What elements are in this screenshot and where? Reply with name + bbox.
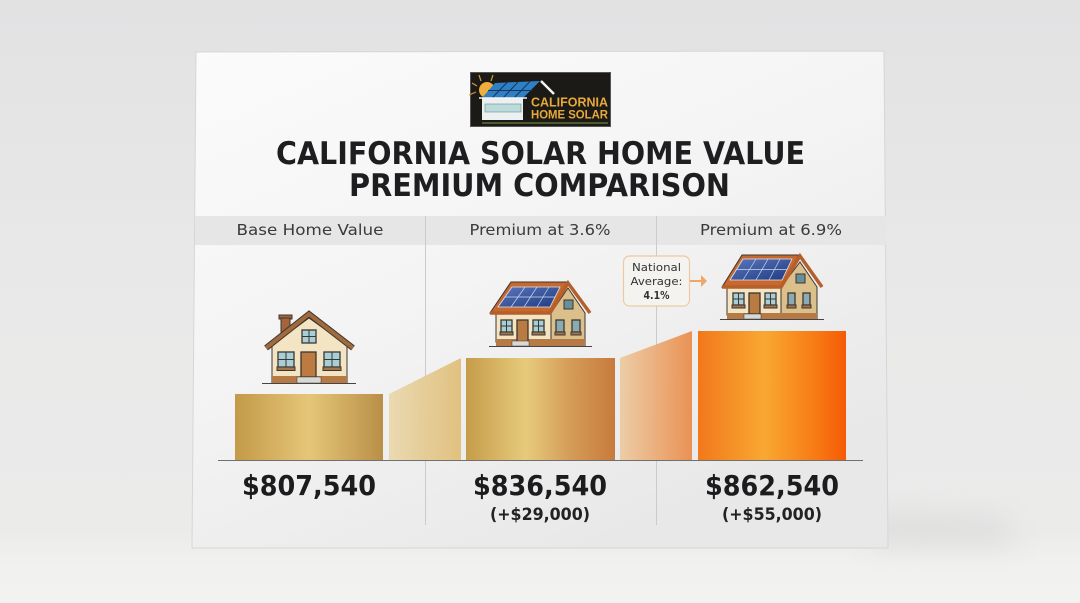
logo: California Home Solar (469, 72, 610, 126)
value: premium 6.9% (705, 470, 839, 525)
value: premium 3.6%: $836,540 (473, 470, 607, 502)
connector: 3.6% to 6.9% (620, 331, 692, 460)
connector: base to 3.6% (389, 358, 461, 460)
bar: 6.9% premium (698, 331, 846, 460)
callout: national average: National (632, 262, 681, 274)
column header band: Premium at 6.9% (700, 221, 842, 239)
icon: solar house at 3.6% (489, 282, 592, 346)
icon: base house (262, 314, 356, 384)
value: premium 3.6% (473, 470, 607, 525)
icon: sun (469, 75, 495, 98)
callout: national average (624, 256, 707, 306)
value: premium 3.6%: (+$29,000) (490, 505, 590, 525)
bar: base value (235, 394, 383, 460)
bar chart (218, 331, 863, 460)
card shadow (870, 512, 1020, 548)
title: PREMIUM COMPARISON (349, 168, 730, 204)
icon: solar house at 6.9% (720, 255, 824, 320)
column header band: Base Home Value (236, 221, 384, 239)
logo: California Home Solar: HOME SOLAR (531, 108, 608, 122)
panel: comparison card (192, 51, 888, 548)
value: premium 6.9%: $862,540 (705, 470, 839, 502)
callout: national average: 4.1% (644, 290, 670, 302)
logo: California Home Solar: CALIFORNIA (531, 96, 608, 110)
value: premium 6.9%: (+$55,000) (722, 505, 822, 525)
arrow: callout to house (690, 275, 707, 287)
callout: national average: Average: (630, 276, 682, 288)
column header band (195, 216, 886, 245)
title: CALIFORNIA SOLAR HOME VALUE (276, 136, 805, 172)
value: base home: $807,540 (242, 470, 376, 502)
title (276, 136, 805, 204)
column header band: Premium at 3.6% (470, 221, 610, 239)
bar: 3.6% premium (466, 358, 615, 460)
